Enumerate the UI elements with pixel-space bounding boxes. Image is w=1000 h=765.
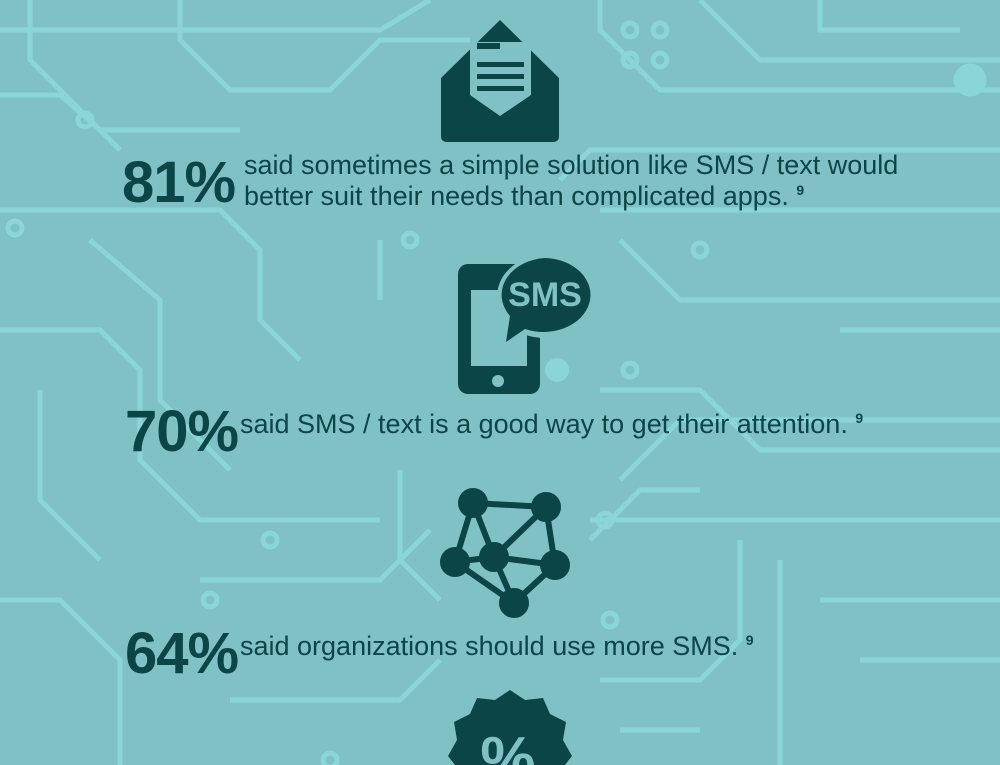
icon: phone with SMS bubble: SMS [508, 276, 582, 314]
stat: 70%: said SMS / text is a good way to get their attention. 9 [240, 409, 863, 439]
stat: 64% [125, 621, 754, 686]
icon: percent badge [448, 690, 572, 765]
stat: 81%: said sometimes a simple solution like SMS / text would [244, 150, 898, 180]
stat: 81%: better suit their needs than complicated apps. 9 [244, 181, 804, 211]
stat: 64%: 64% [125, 621, 238, 686]
stat: 81% [122, 150, 898, 215]
stat: 64%: said organizations should use more SMS. 9 [240, 631, 754, 661]
stat: 70% [125, 399, 863, 464]
icon: phone with SMS bubble [458, 258, 590, 394]
icon: network [440, 488, 570, 618]
icon: envelope [441, 20, 559, 142]
stat: 81%: 81% [122, 150, 235, 215]
stat: 70%: 70% [125, 399, 238, 464]
